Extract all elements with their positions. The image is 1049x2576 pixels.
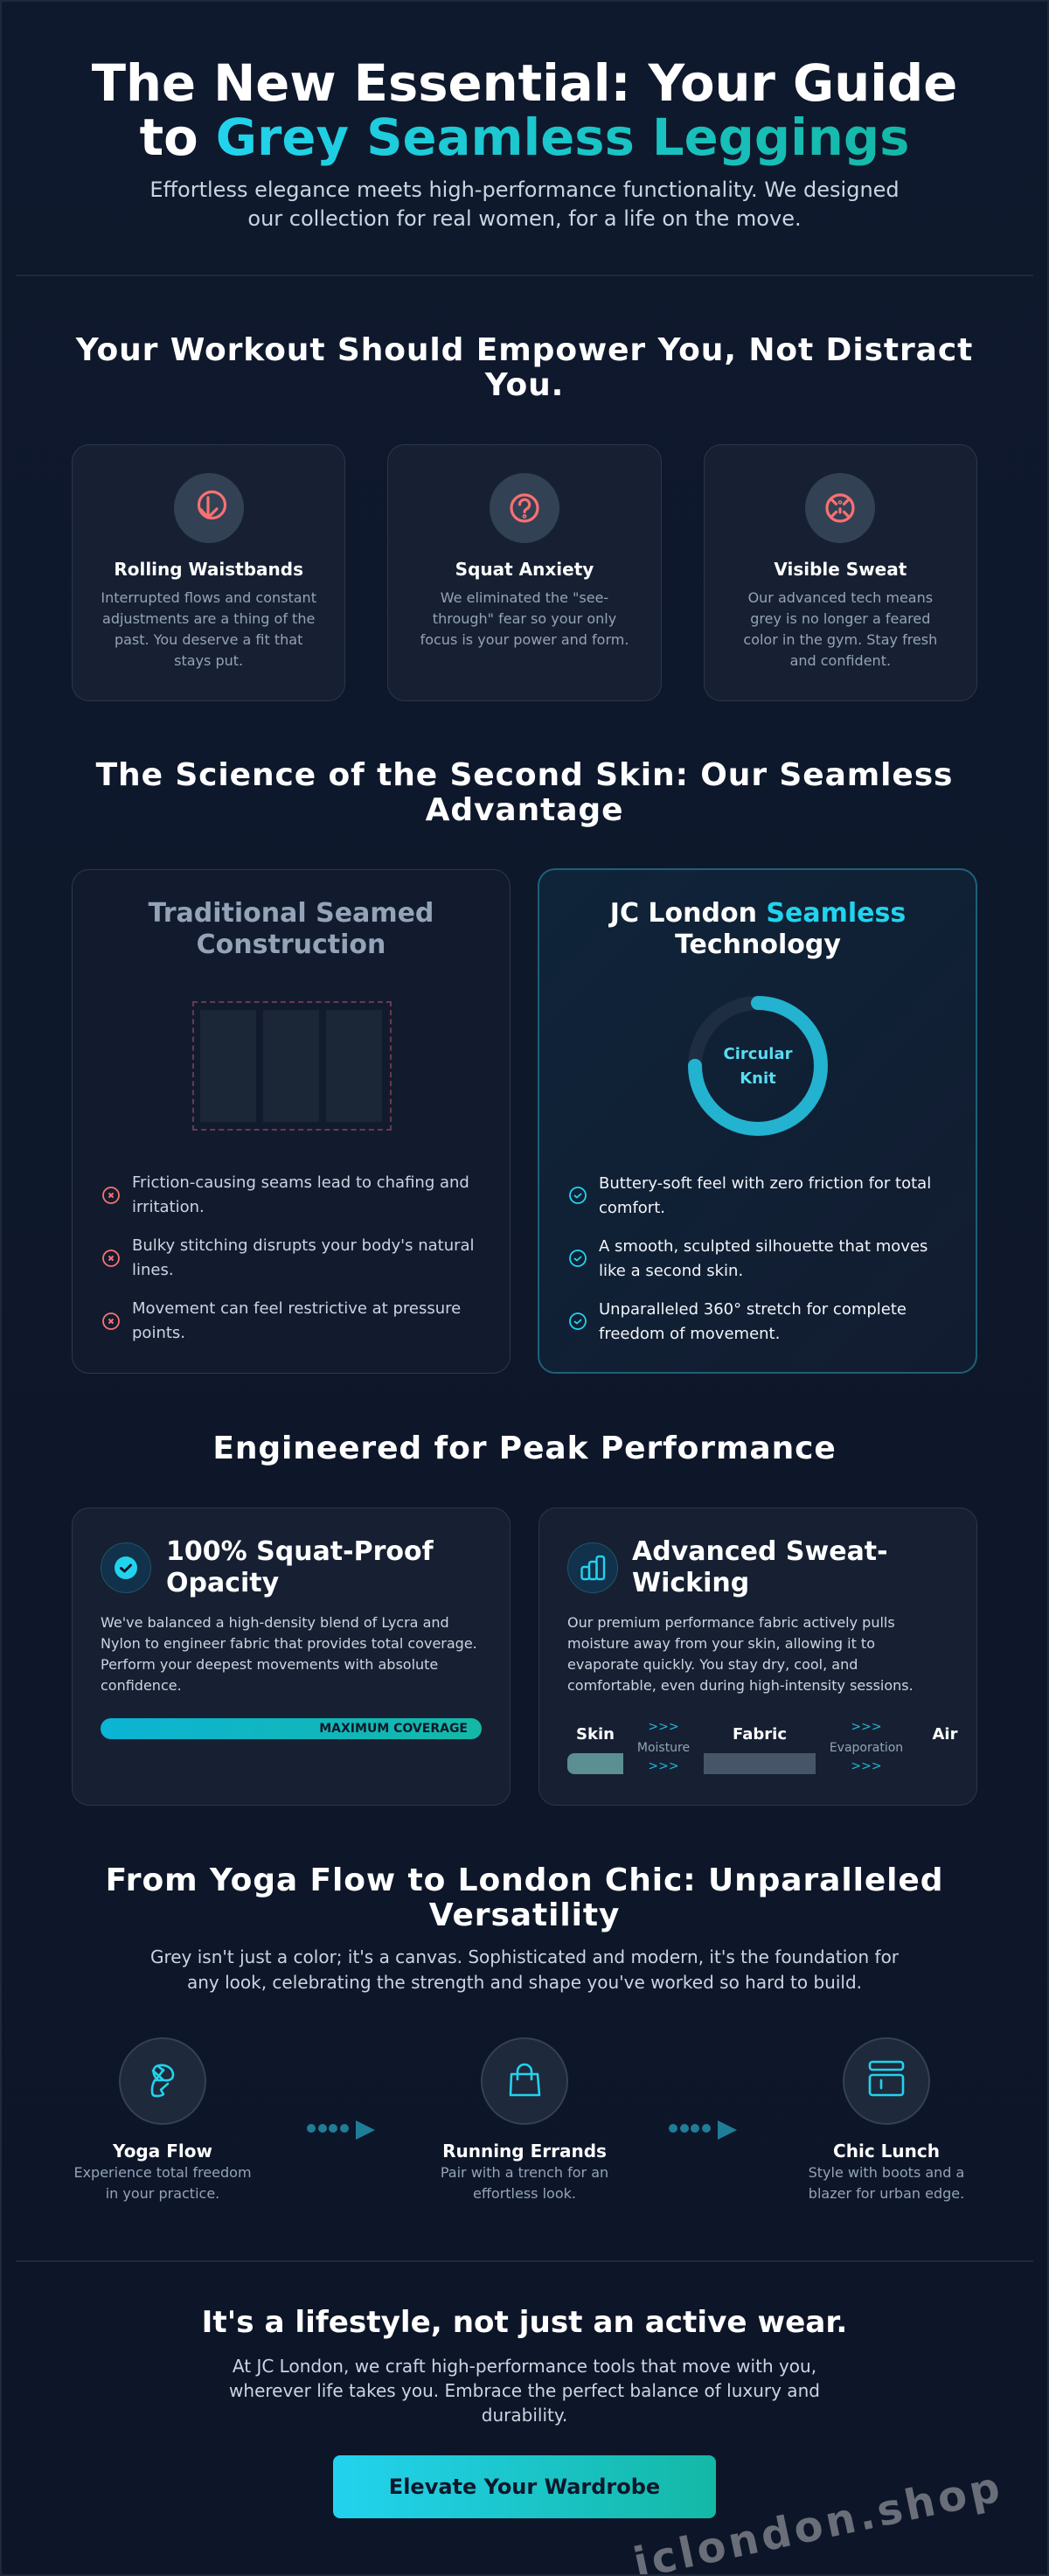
text: sweat-wicking: moisture away from your skin, allowing it to bbox=[567, 1635, 875, 1652]
heading: workout: You. bbox=[485, 367, 564, 403]
arrow: yoga to errands bbox=[307, 2120, 375, 2140]
panel: JC London seamless technology bbox=[538, 868, 977, 1374]
icon: check badge bbox=[101, 1542, 151, 1593]
text: squat-proof: We've balanced a high-density blend of Lycra and bbox=[101, 1614, 449, 1631]
flow: moisture bbox=[637, 1720, 690, 1773]
heading: workout: Your Workout Should Empower You, Not Distract bbox=[76, 332, 973, 368]
icon: x bbox=[102, 1187, 120, 1204]
text: visible sweat: Our advanced tech means bbox=[748, 589, 933, 606]
text: chic lunch: blazer for urban edge. bbox=[809, 2185, 964, 2202]
heading: lifestyle: It's a lifestyle, not just an active wear. bbox=[202, 2305, 847, 2340]
text: versatility intro bbox=[150, 1946, 899, 1992]
text: yoga flow: in your practice. bbox=[106, 2185, 219, 2202]
heading: squat anxiety: Squat Anxiety bbox=[455, 559, 594, 580]
item text: Movement can feel restrictive at pressure bbox=[132, 1299, 461, 1318]
label: skin: Skin bbox=[576, 1725, 615, 1744]
text: running errands: effortless look. bbox=[473, 2185, 576, 2202]
item text: freedom of movement. bbox=[599, 1325, 780, 1343]
heading: traditional: Traditional Seamed bbox=[149, 898, 434, 929]
icon: rolling waistband bbox=[174, 473, 244, 543]
label: fabric: Fabric bbox=[733, 1725, 787, 1744]
title bbox=[92, 54, 957, 167]
text: squat anxiety: through" fear so your only bbox=[433, 610, 616, 627]
icon: question mark bbox=[490, 473, 559, 543]
panel: traditional seamed construction bbox=[72, 869, 511, 1374]
item text bbox=[599, 1237, 927, 1280]
text: visible sweat: color in the gym. Stay fresh bbox=[743, 631, 937, 648]
flow: moisture: >>> bbox=[648, 1720, 679, 1734]
subtitle: our collection for real women, for a life on the move. bbox=[247, 206, 802, 231]
text: rolling waistbands: adjustments are a thing of the bbox=[102, 610, 315, 627]
text: visible sweat bbox=[743, 589, 937, 669]
flow: moisture: Moisture bbox=[637, 1741, 690, 1755]
label: yoga flow: Yoga Flow bbox=[113, 2141, 212, 2162]
text: squat-proof: confidence. bbox=[101, 1677, 182, 1694]
list: seam problems bbox=[102, 1173, 475, 1342]
heading: seamless: Technology bbox=[675, 929, 841, 960]
text: sweat-wicking: Our premium performance fabric actively pulls bbox=[567, 1614, 895, 1631]
text: closing: At JC London, we craft high-performance tools that move with you, bbox=[233, 2356, 816, 2377]
bar label: MAXIMUM COVERAGE bbox=[319, 1722, 468, 1736]
icon: bars bbox=[567, 1542, 618, 1593]
text: sweat-wicking: comfortable, even during high-intensity sessions. bbox=[567, 1677, 914, 1694]
text: yoga flow bbox=[73, 2164, 252, 2202]
icon: box bbox=[843, 2037, 930, 2125]
heading: sweat-wicking bbox=[632, 1536, 888, 1598]
heading: traditional: Construction bbox=[197, 929, 386, 960]
heading: workout bbox=[75, 332, 973, 403]
icon: shopping bag bbox=[481, 2037, 568, 2125]
heading: science: The Science of the Second Skin: Our Seamless bbox=[96, 757, 953, 793]
text: rolling waistbands: Interrupted flows and constant bbox=[101, 589, 316, 606]
item text: irritation. bbox=[132, 1198, 205, 1216]
heading: versatility bbox=[106, 1862, 943, 1933]
button: Elevate Your Wardrobe bbox=[389, 2475, 660, 2499]
chart: circular knit ring: Circular bbox=[724, 1045, 793, 1063]
item text bbox=[132, 1236, 475, 1279]
icon: check bbox=[569, 1312, 587, 1330]
step: running errands bbox=[428, 2037, 621, 2205]
label: air: Air bbox=[932, 1725, 957, 1744]
footer bbox=[0, 2262, 1049, 2574]
heading: science bbox=[96, 757, 953, 828]
item text: A smooth, sculpted silhouette that moves bbox=[599, 1237, 927, 1256]
item text: lines. bbox=[132, 1261, 174, 1279]
chart: circular knit ring: Knit bbox=[740, 1069, 776, 1088]
item text: Bulky stitching disrupts your body's natural bbox=[132, 1236, 475, 1255]
item text: Buttery-soft feel with zero friction for total bbox=[599, 1174, 931, 1193]
text: squat-proof: Perform your deepest movements with absolute bbox=[101, 1656, 438, 1673]
text: running errands bbox=[428, 2162, 621, 2204]
icon: x bbox=[102, 1312, 120, 1330]
heading: visible sweat: Visible Sweat bbox=[774, 559, 907, 580]
heading: squat-proof: Opacity bbox=[166, 1568, 279, 1598]
item text: Unparalleled 360° stretch for complete bbox=[599, 1300, 907, 1319]
item text: points. bbox=[132, 1324, 185, 1342]
text: closing bbox=[0, 2354, 1049, 2427]
text: closing: durability. bbox=[482, 2405, 567, 2426]
heading: science: Advantage bbox=[426, 792, 623, 828]
icon: crossed sweat bbox=[805, 473, 875, 543]
panel: squat-proof opacity bbox=[72, 1507, 511, 1806]
item text bbox=[132, 1299, 461, 1342]
heading: sweat-wicking: Wicking bbox=[632, 1568, 749, 1598]
text: chic lunch: Style with boots and a bbox=[809, 2164, 964, 2181]
list: seamless benefits bbox=[569, 1174, 931, 1343]
text: squat anxiety: We eliminated the "see- bbox=[441, 589, 608, 606]
header bbox=[92, 54, 957, 231]
icon: check bbox=[569, 1187, 587, 1204]
title: to Grey Seamless Leggings bbox=[140, 108, 909, 167]
text: yoga flow: Experience total freedom bbox=[73, 2164, 252, 2181]
text: versatility intro: Grey isn't just a color; it's a canvas. Sophisticated and modern, it's the foundation for bbox=[150, 1946, 899, 1967]
heading: seamless bbox=[608, 898, 906, 960]
flow: evaporation: Evaporation bbox=[830, 1741, 903, 1755]
text: versatility intro: any look, celebrating the strength and shape you've worked so hard to build. bbox=[187, 1971, 862, 1992]
text: sweat-wicking: evaporate quickly. You stay dry, cool, and bbox=[567, 1656, 858, 1673]
flow: moisture: >>> bbox=[648, 1759, 679, 1773]
diagram: seamed panels bbox=[192, 1001, 392, 1131]
heading: squat-proof bbox=[166, 1536, 434, 1598]
icon: yoga bbox=[119, 2037, 206, 2125]
step: yoga flow bbox=[73, 2037, 252, 2202]
swatch: fabric bbox=[704, 1753, 816, 1774]
card: visible sweat bbox=[704, 444, 977, 701]
text: squat anxiety: focus is your power and form. bbox=[420, 631, 629, 648]
item text bbox=[132, 1173, 469, 1216]
heading: performance: Engineered for Peak Performance bbox=[212, 1431, 837, 1466]
text: closing: wherever life takes you. Embrace the perfect balance of luxury and bbox=[229, 2380, 820, 2401]
flow: evaporation: >>> bbox=[851, 1759, 882, 1773]
item text: Friction-causing seams lead to chafing and bbox=[132, 1173, 469, 1192]
heading: squat-proof: 100% Squat-Proof bbox=[166, 1536, 434, 1567]
text: squat-proof bbox=[101, 1614, 477, 1694]
heading: versatility: Versatility bbox=[429, 1897, 620, 1933]
panel: sweat-wicking bbox=[538, 1507, 977, 1806]
heading: seamless: JC London Seamless bbox=[610, 898, 906, 929]
text: rolling waistbands bbox=[101, 589, 316, 669]
icon: check bbox=[569, 1250, 587, 1267]
text: running errands: Pair with a trench for an bbox=[441, 2164, 608, 2181]
flow: evaporation bbox=[830, 1720, 903, 1773]
text: chic lunch bbox=[790, 2162, 983, 2204]
label: running errands: Running Errands bbox=[442, 2141, 607, 2162]
heading: traditional bbox=[149, 898, 434, 960]
heading: versatility: From Yoga Flow to London Chic: Unparalleled bbox=[106, 1862, 943, 1898]
card: rolling waistbands bbox=[72, 444, 345, 701]
text: visible sweat: and confident. bbox=[790, 652, 891, 669]
item text: comfort. bbox=[599, 1199, 665, 1217]
text: squat anxiety bbox=[420, 589, 629, 648]
text: rolling waistbands: past. You deserve a fit that bbox=[115, 631, 302, 648]
button bbox=[333, 2455, 716, 2518]
arrow: errands to lunch bbox=[668, 2120, 740, 2141]
label: chic lunch: Chic Lunch bbox=[833, 2141, 940, 2162]
chart: circular knit ring bbox=[688, 996, 828, 1136]
step: chic lunch bbox=[790, 2037, 983, 2205]
swatch: skin bbox=[567, 1753, 623, 1774]
card: squat anxiety bbox=[387, 444, 662, 701]
item text bbox=[599, 1300, 907, 1343]
text: squat-proof: Nylon to engineer fabric that provides total coverage. bbox=[101, 1635, 477, 1652]
item text: like a second skin. bbox=[599, 1262, 743, 1280]
subtitle: Effortless elegance meets high-performance functionality. We designed bbox=[149, 178, 900, 202]
icon: x bbox=[102, 1250, 120, 1267]
text: visible sweat: grey is no longer a feared bbox=[750, 610, 930, 627]
subtitle bbox=[149, 178, 900, 231]
heading: sweat-wicking: Advanced Sweat- bbox=[632, 1536, 888, 1567]
item text bbox=[599, 1174, 931, 1217]
heading: rolling waistbands: Rolling Waistbands bbox=[114, 559, 303, 580]
bar: maximum coverage bbox=[101, 1718, 482, 1739]
title: The New Essential: Your Guide bbox=[92, 54, 957, 113]
panel: pain points bbox=[72, 444, 977, 701]
flow: evaporation: >>> bbox=[851, 1720, 882, 1734]
text: sweat-wicking bbox=[567, 1614, 914, 1694]
text: rolling waistbands: stays put. bbox=[174, 652, 243, 669]
diagram: moisture flow bbox=[567, 1720, 958, 1774]
